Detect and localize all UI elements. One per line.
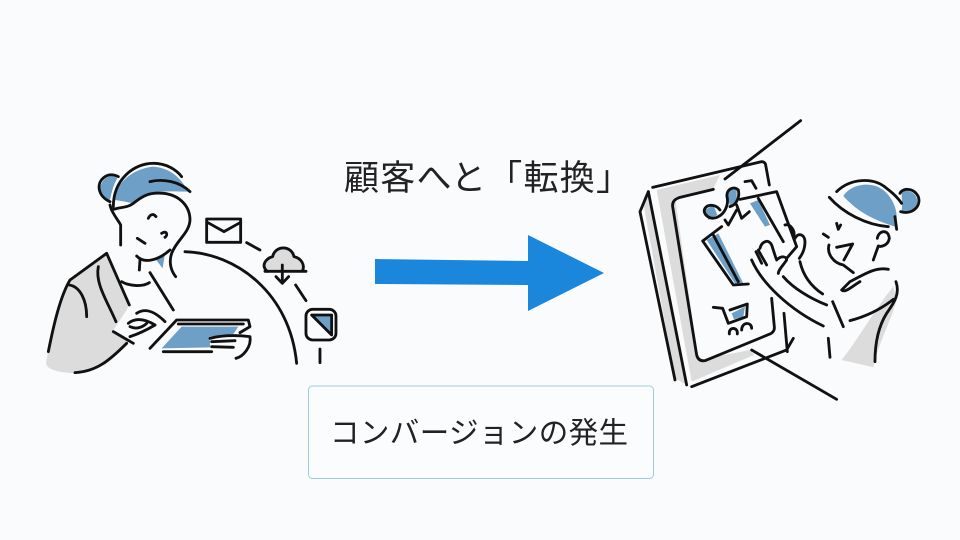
screen frame lines: [640, 121, 837, 399]
woman line work: [823, 181, 919, 362]
screen frame fill: [643, 175, 754, 385]
icon: gift box: [703, 187, 797, 285]
dash: [316, 349, 324, 363]
illustration: woman using tablet with data icons: [46, 163, 336, 373]
title: 顧客へと「転換」: [344, 159, 631, 198]
icon: file box: [306, 309, 336, 340]
woman line work: [48, 163, 190, 373]
hair and bun fill: [100, 167, 188, 203]
body fill: [46, 253, 130, 373]
dash: [247, 243, 260, 250]
hair and bun fill: [843, 185, 917, 227]
arrow: [375, 235, 604, 311]
neck shadow: [155, 253, 165, 268]
callout box: [308, 386, 654, 478]
tablet: [150, 320, 250, 358]
icon: envelope: [207, 219, 241, 242]
icon: shopping cart: [713, 304, 752, 334]
arc: [185, 252, 297, 363]
dash: [296, 285, 306, 301]
callout text: コンバージョンの発生: [330, 417, 628, 450]
illustration: woman selecting gift on screen: [640, 121, 919, 399]
icon: cloud download: [263, 248, 306, 283]
skirt fill: [842, 287, 897, 367]
hands and arms: [752, 225, 827, 326]
